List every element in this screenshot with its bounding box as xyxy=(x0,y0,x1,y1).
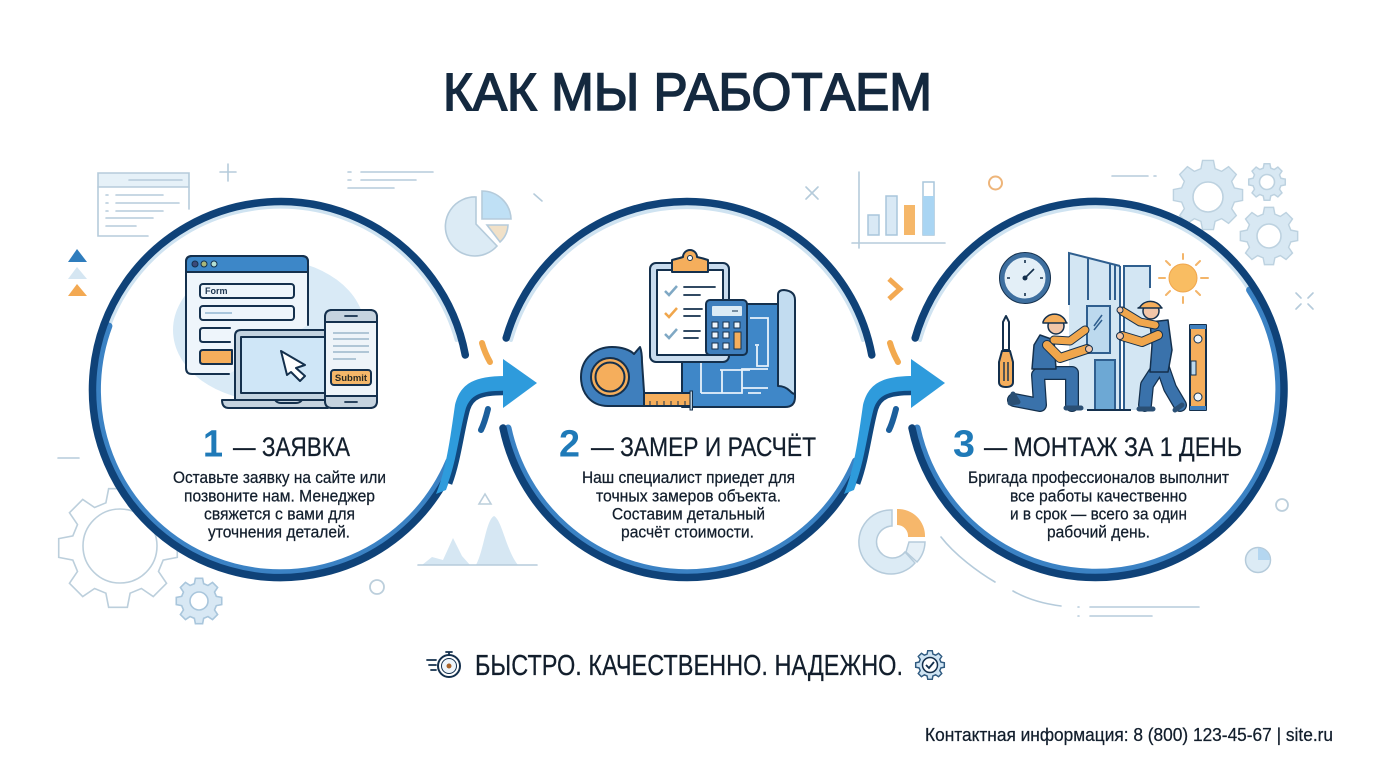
decor: ring xyxy=(370,580,384,594)
decor: small gear xyxy=(176,578,222,624)
browser form window: Form xyxy=(205,286,228,296)
text: step 2 description: расчёт стоимости. xyxy=(621,524,754,542)
heading: step 3: 3 xyxy=(953,424,975,466)
icon: measuring tools and plan xyxy=(581,250,795,410)
decor: ring right xyxy=(1276,499,1288,511)
circle 1 ring xyxy=(93,202,467,578)
clipboard xyxy=(650,250,729,362)
window frame xyxy=(1069,253,1150,410)
decor: cross xyxy=(806,187,818,199)
icon: gear with check xyxy=(916,651,944,679)
text: step 3 description: и в срок — всего за один xyxy=(1010,506,1187,524)
decor: tick xyxy=(534,194,542,201)
decor: triangles xyxy=(68,249,87,296)
decor: browser document outline xyxy=(98,173,189,236)
heading: step 1: 1 xyxy=(203,424,223,466)
heading: step 3 xyxy=(953,424,1242,466)
decor: pie chart xyxy=(445,191,511,256)
text: step 1 description: уточнения деталей. xyxy=(208,524,350,542)
heading: step 2: — ЗАМЕР И РАСЧЁТ xyxy=(591,432,816,462)
text: step 1 description: свяжется с вами для xyxy=(204,506,355,524)
decor: sparkle xyxy=(1296,293,1313,309)
text: step 2 description xyxy=(582,469,795,542)
decor: curved lines lower right xyxy=(941,537,1199,616)
decor: plus sign xyxy=(220,164,236,181)
decor: gears top right xyxy=(1173,160,1298,265)
screwdriver xyxy=(999,316,1013,387)
worker kneeling xyxy=(1010,314,1092,408)
decor: left dash xyxy=(58,457,79,459)
decor: donut chart xyxy=(859,509,925,574)
text: step 3 description: рабочий день. xyxy=(1047,524,1150,542)
heading: step 1: — ЗАЯВКА xyxy=(233,432,350,462)
decor: small pie xyxy=(1246,548,1270,572)
laptop xyxy=(222,330,328,408)
circle 3 ring xyxy=(910,201,1284,577)
calculator xyxy=(706,300,747,355)
decor: big outline gear xyxy=(59,489,177,607)
decor: orange chevron xyxy=(889,279,900,299)
smartphone: Submit xyxy=(335,373,368,384)
arrow 1 to 2 xyxy=(436,343,537,494)
wall clock xyxy=(1000,252,1050,304)
smartphone xyxy=(325,310,377,408)
decorative background icons xyxy=(58,160,1313,624)
circle 2 ring xyxy=(501,202,873,578)
decor: short line xyxy=(1112,175,1156,177)
text: step 3 description xyxy=(968,469,1229,542)
text: step 3 description: все работы качественно xyxy=(1010,488,1187,506)
heading: step 3: — МОНТАЖ ЗА 1 ДЕНЬ xyxy=(984,432,1242,462)
browser form window xyxy=(186,256,308,374)
text: step 2 description: Наш специалист приедет для xyxy=(582,469,795,487)
tagline xyxy=(427,650,944,682)
heading: step 2 xyxy=(559,424,816,466)
text: step 2 description: Составим детальный xyxy=(612,506,765,524)
blueprint xyxy=(682,290,795,407)
icon: online form on devices xyxy=(173,256,377,408)
decor: orange ring xyxy=(989,176,1002,190)
decor: text lines top xyxy=(348,172,433,188)
spirit level xyxy=(1190,325,1206,410)
text: step 1 description: Оставьте заявку на сайте или xyxy=(173,469,386,487)
icon: stopwatch xyxy=(427,652,460,677)
text: step 1 description xyxy=(173,469,386,542)
decor: area chart xyxy=(418,516,537,565)
arrow 2 to 3 xyxy=(844,343,945,494)
worker standing xyxy=(1116,301,1182,410)
contact information: Контактная информация: 8 (800) 123-45-67 | site.ru xyxy=(925,724,1333,745)
text: step 2 description: точных замеров объекта. xyxy=(596,488,781,506)
tagline text: БЫСТРО. КАЧЕСТВЕННО. НАДЕЖНО. xyxy=(475,650,903,682)
decor: triangle outline xyxy=(479,494,491,504)
heading: step 1 xyxy=(203,424,350,466)
tape measure xyxy=(581,347,692,410)
heading: step 2: 2 xyxy=(559,424,580,466)
sun xyxy=(1159,254,1208,303)
icon: installation team at window xyxy=(999,252,1208,410)
text: step 3 description: Бригада профессионалов выполнит xyxy=(968,469,1229,487)
decor: bar chart xyxy=(852,172,945,248)
text: step 1 description: позвоните нам. Менеджер xyxy=(184,488,375,506)
cursor xyxy=(281,351,305,381)
title: КАК МЫ РАБОТАЕМ xyxy=(443,63,932,122)
